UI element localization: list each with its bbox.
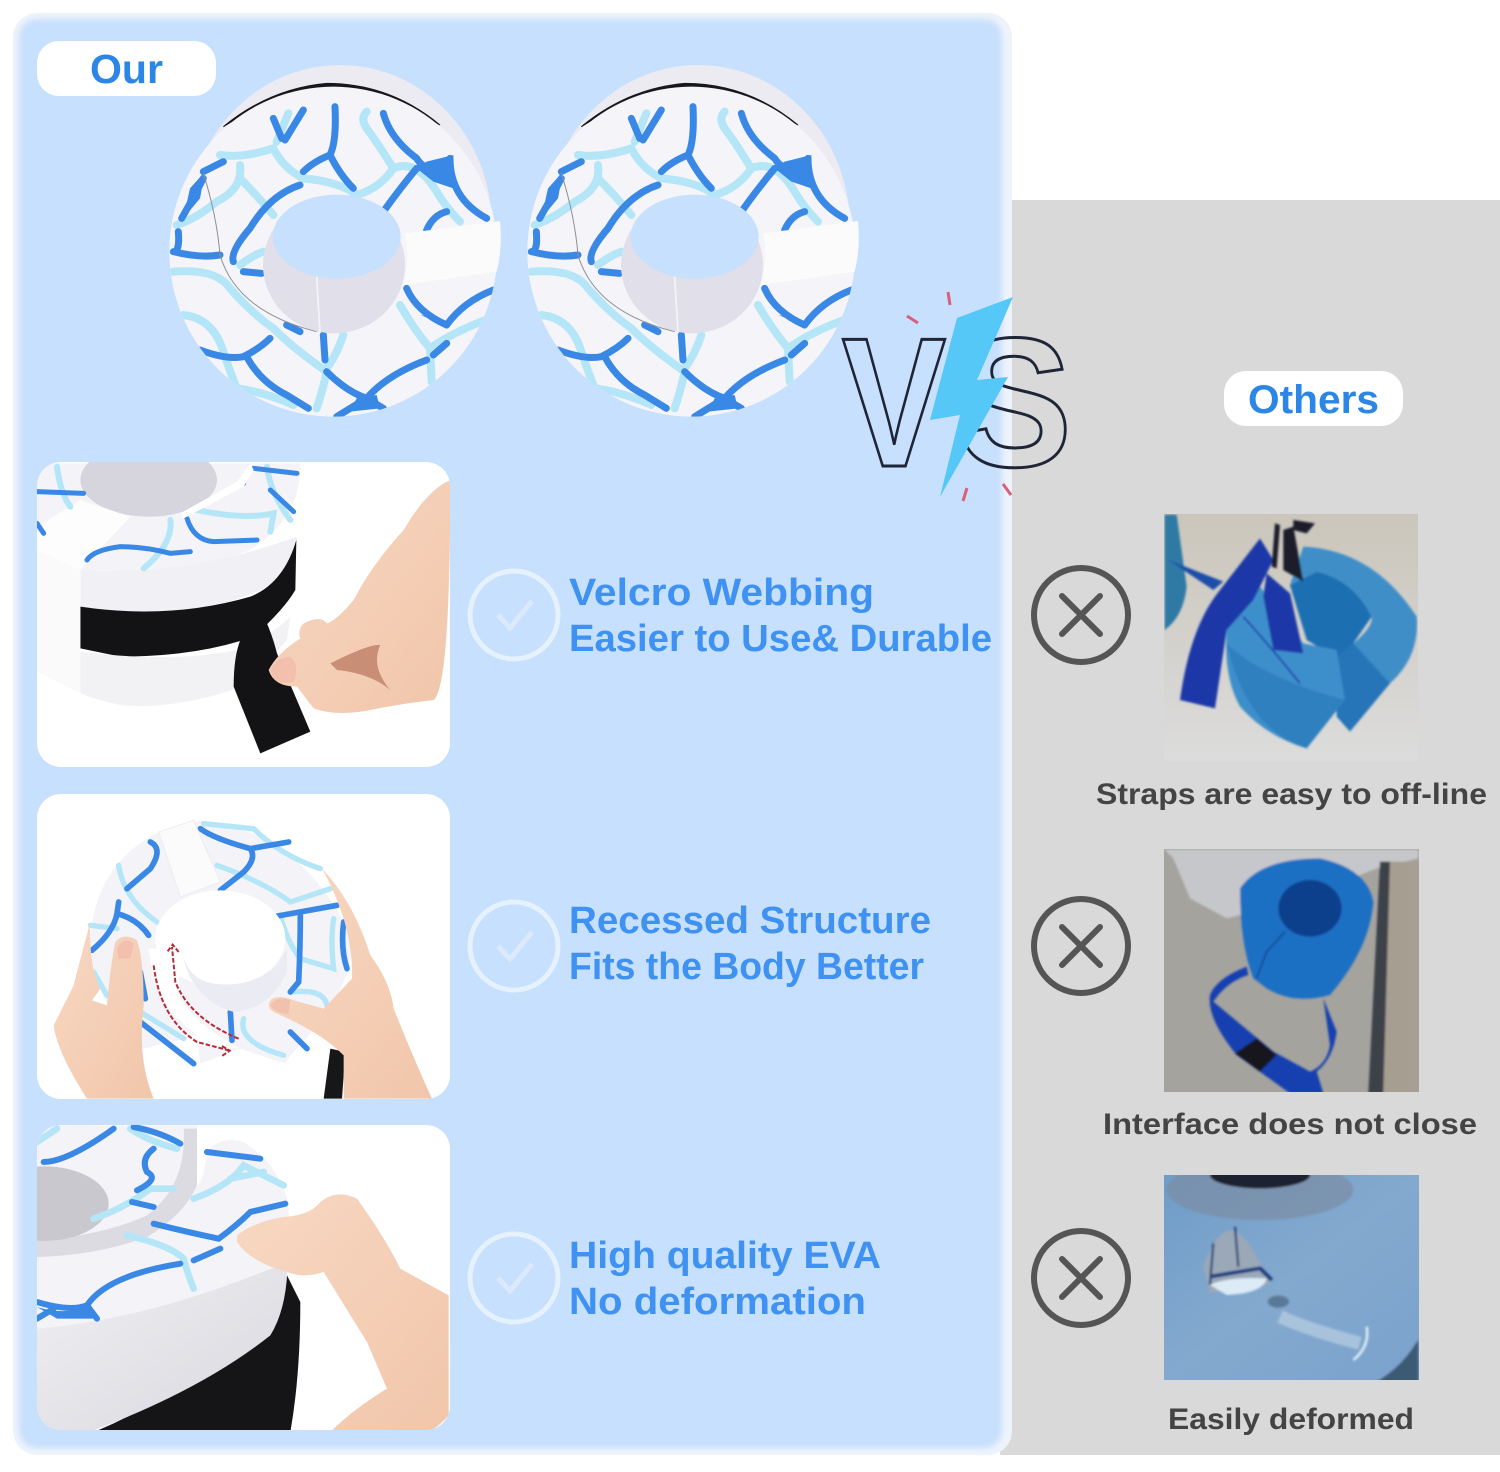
badge: Our <box>37 41 216 96</box>
icon: cross 2 <box>1034 899 1128 993</box>
icon: cross 1 <box>1034 568 1128 662</box>
VS emblem: V <box>842 299 946 505</box>
text: recessed structure feature <box>470 900 931 990</box>
photo panel: high quality EVA <box>0 1125 450 1432</box>
text: recessed structure feature: Fits the Body Better <box>569 946 924 988</box>
badge: Our: Our <box>90 46 163 92</box>
badge: Others: Others <box>1248 378 1379 422</box>
photo: others strap <box>1164 514 1418 761</box>
text: others strap caption: Straps are easy to off-line <box>1096 778 1487 811</box>
text: velcro webbing feature: Easier to Use& Durable <box>569 618 992 660</box>
text: high quality EVA feature <box>470 1234 881 1323</box>
text: high quality EVA feature: No deformation <box>569 1281 866 1323</box>
text: high quality EVA feature: High quality EVA <box>569 1235 881 1277</box>
text: velcro webbing feature <box>470 571 992 660</box>
text: velcro webbing feature: Velcro Webbing <box>569 572 874 614</box>
product photo: left ring <box>169 65 501 417</box>
VS emblem: S <box>957 299 1072 505</box>
badge: Others <box>1224 371 1403 426</box>
VS emblem <box>842 292 1072 505</box>
panel: others background <box>1000 200 1500 1455</box>
photo: others interface <box>1164 849 1419 1093</box>
text: recessed structure feature: Recessed Structure <box>569 900 931 942</box>
photo: others deformed foam <box>1164 1160 1419 1383</box>
photo panel: recessed structure <box>37 794 450 1099</box>
product photo: right ring <box>527 65 859 417</box>
text: others deformed caption: Easily deformed <box>1168 1403 1414 1436</box>
text: others interface caption: Interface does not close <box>1103 1108 1477 1141</box>
panel: our background <box>13 13 1012 1455</box>
photo panel: velcro webbing <box>37 443 450 767</box>
icon: cross 3 <box>1034 1231 1128 1325</box>
